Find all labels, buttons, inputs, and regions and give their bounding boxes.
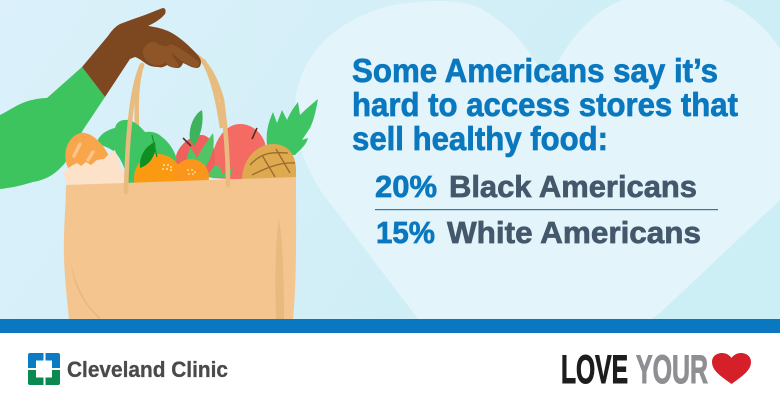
paper bag body bbox=[64, 177, 296, 319]
centre leaves bbox=[185, 133, 214, 178]
logo mark bbox=[28, 353, 60, 385]
front bag handles bbox=[126, 53, 228, 192]
Love Your Heart logo: YOUR bbox=[636, 348, 708, 392]
headline bbox=[352, 52, 738, 157]
arm: green sleeve bbox=[0, 67, 105, 189]
background bbox=[0, 0, 780, 320]
orange highlights bbox=[162, 164, 196, 175]
logo wordmark: Cleveland Clinic bbox=[67, 357, 228, 382]
footer bbox=[0, 333, 780, 410]
hand bbox=[82, 8, 201, 97]
bag folds bbox=[71, 219, 284, 319]
bread paper wrapper bbox=[63, 150, 129, 185]
stem leaf bbox=[190, 110, 203, 146]
statistic: Black Americans: Black Americans bbox=[449, 169, 697, 204]
back bag handles bbox=[137, 60, 222, 128]
heart background shape bbox=[295, 0, 780, 320]
statistic: White Americans: White Americans bbox=[447, 215, 701, 250]
greens bbox=[97, 120, 177, 184]
orange leaf bbox=[140, 142, 155, 168]
orange large bbox=[134, 154, 182, 202]
divider bbox=[375, 209, 718, 210]
apple stems bbox=[183, 128, 257, 146]
finger shading bbox=[143, 42, 199, 67]
illustration: grocery bag and arm bbox=[0, 8, 318, 319]
orange small bbox=[173, 159, 209, 195]
large apple bbox=[212, 124, 266, 180]
statistic: White Americans: 15% bbox=[376, 215, 435, 250]
headline: hard to access stores that bbox=[352, 86, 738, 123]
small apple bbox=[175, 135, 215, 178]
Love Your Heart logo: LOVE bbox=[561, 348, 628, 392]
pineapple bbox=[242, 144, 296, 180]
Cleveland Clinic logo bbox=[28, 353, 228, 385]
headline: sell healthy food: bbox=[352, 120, 608, 157]
statistic: Black Americans: 20% bbox=[375, 169, 437, 204]
headline: Some Americans say it’s bbox=[352, 52, 718, 89]
pineapple leaves bbox=[267, 99, 318, 155]
Love Your Heart logo bbox=[561, 348, 751, 392]
bread bbox=[65, 133, 110, 170]
icon: red heart bbox=[712, 353, 751, 384]
blue band bbox=[0, 319, 780, 333]
